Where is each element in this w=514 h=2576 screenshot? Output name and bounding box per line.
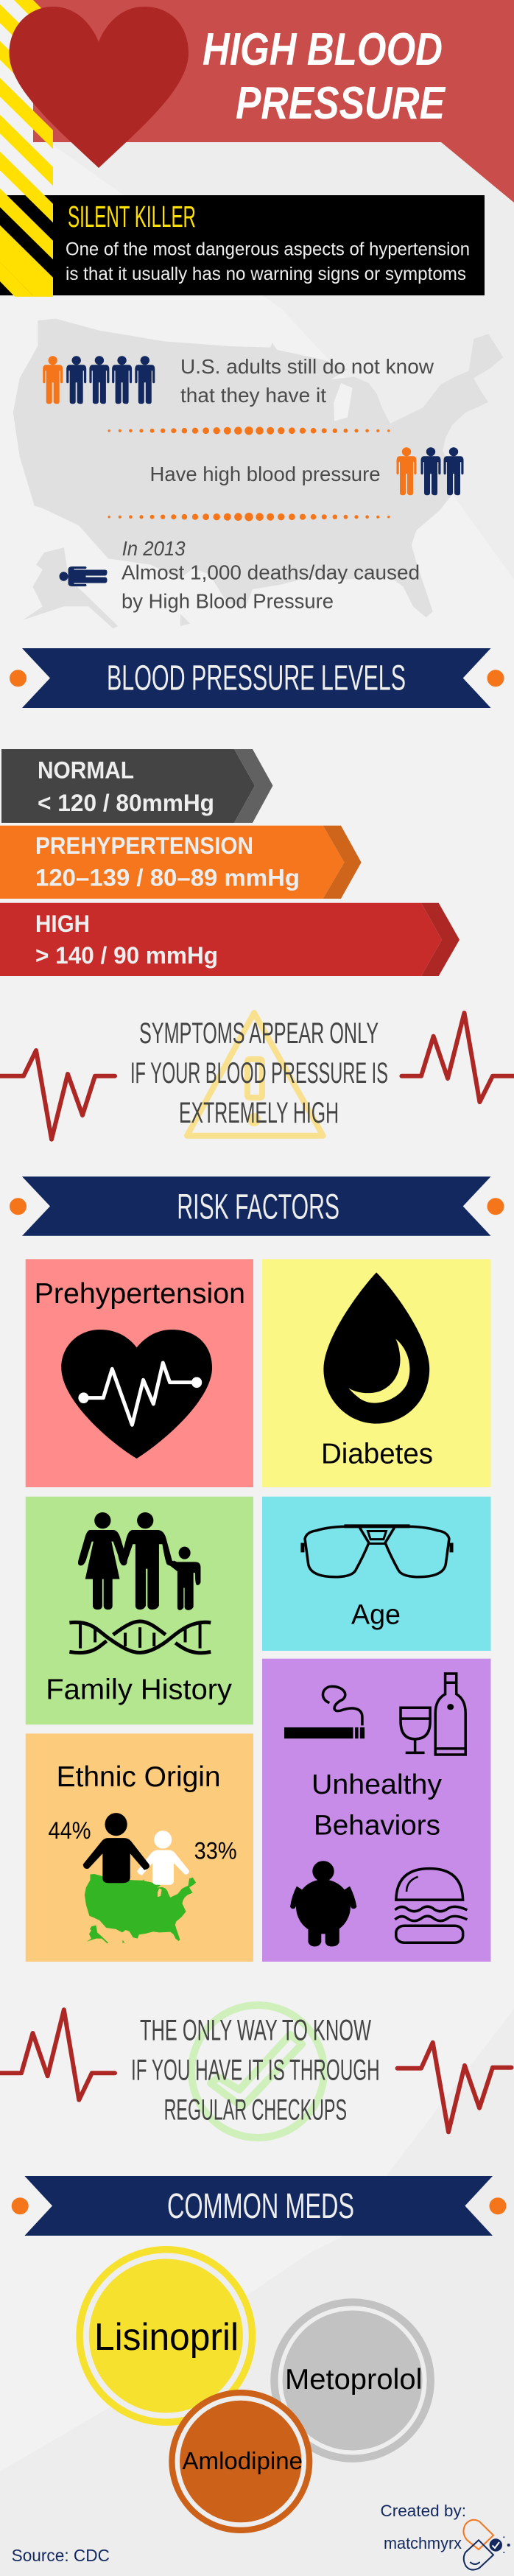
callout: checkups text: THE ONLY WAY TO KNOW	[140, 2014, 371, 2046]
hazard stripes with black panel	[0, 0, 485, 297]
heading: risk factors: RISK FACTORS	[177, 1187, 339, 1226]
text: silent killer description	[66, 239, 470, 284]
source note: Source: CDC	[12, 2546, 110, 2565]
icon: lying person	[59, 566, 108, 586]
level bar: normal	[1, 749, 272, 823]
icon: heart with pulse	[61, 1330, 212, 1459]
ECG line right, symptoms	[401, 1013, 514, 1102]
statistic: deaths per day	[59, 537, 420, 613]
circle: lisinopril	[76, 2246, 256, 2426]
label: diabetes: Diabetes	[321, 1439, 433, 1470]
icon: cigarette	[284, 1686, 365, 1738]
text: silent killer description: is that it usually has no warning signs or symptoms	[66, 264, 466, 284]
callout: checkups text: REGULAR CHECKUPS	[164, 2094, 347, 2126]
label: unhealthy behaviors: Behaviors	[314, 1810, 440, 1841]
icon: two figures	[83, 1813, 189, 1885]
credit: created by matchmyrx: matchmyrx	[384, 2534, 462, 2552]
circle: lisinopril: Lisinopril	[94, 2316, 239, 2359]
circle: metoprolol	[270, 2298, 434, 2463]
label: ethnic origin: Ethnic Origin	[57, 1761, 221, 1793]
icon: large red heart	[9, 7, 189, 168]
icon: five people	[43, 356, 155, 404]
level bar: high	[0, 903, 460, 976]
panel: ethnic origin	[26, 1733, 253, 1962]
credit: created by matchmyrx	[380, 2502, 510, 2570]
level bar: normal: < 120 / 80mmHg	[38, 790, 214, 816]
icon: green US map	[85, 1874, 196, 1943]
text: have high blood pressure: Have high blood pressure	[150, 463, 380, 485]
heading: risk factors	[10, 1176, 504, 1236]
header: red title banner	[33, 0, 514, 203]
label: prehypertension: Prehypertension	[35, 1278, 245, 1310]
level bar: prehypertension	[0, 826, 362, 899]
US map background	[13, 319, 503, 628]
text: adults unaware: U.S. adults still do not know	[180, 355, 434, 378]
level bar: prehypertension: PREHYPERTENSION	[35, 832, 253, 859]
icon: wine glass and bottle	[401, 1674, 465, 1755]
icon: check mark circle	[191, 2005, 324, 2138]
label: unhealthy behaviors	[311, 1769, 442, 1841]
icon: glasses	[303, 1526, 451, 1577]
text: deaths per day	[122, 537, 420, 613]
hazard stripes	[0, 0, 74, 297]
title	[203, 24, 446, 129]
dotted divider two	[108, 513, 390, 521]
panel: unhealthy behaviors	[262, 1659, 490, 1962]
text: adults unaware: that they have it	[180, 384, 326, 407]
level bar: normal: NORMAL	[38, 757, 134, 784]
silent killer text	[66, 200, 470, 284]
icon: matchmyrx logo	[463, 2520, 510, 2570]
callout: checkups text	[131, 2014, 380, 2126]
statistic: have high blood pressure	[150, 447, 464, 495]
label: age: Age	[351, 1599, 401, 1630]
panel: age	[262, 1497, 490, 1651]
ECG line left, checkups	[0, 2010, 115, 2100]
title: PRESSURE	[236, 78, 446, 129]
stat: 33 percent: 33%	[194, 1838, 237, 1864]
level bar: prehypertension: 120–139 / 80–89 mmHg	[35, 865, 300, 891]
circle: amlodipine: Amlodipine	[183, 2448, 303, 2475]
ECG line left, symptoms	[0, 1050, 115, 1140]
heading: silent killer: SILENT KILLER	[68, 200, 196, 234]
credit: created by matchmyrx: Created by:	[380, 2502, 466, 2520]
heading: blood pressure levels	[10, 648, 504, 708]
icon: warning triangle	[187, 1013, 323, 1136]
panel: diabetes	[262, 1259, 490, 1487]
label: unhealthy behaviors: Unhealthy	[311, 1769, 442, 1800]
panel: silent killer background	[0, 195, 485, 295]
heading: common meds: COMMON MEDS	[167, 2187, 354, 2226]
callout: symptoms text	[130, 1017, 388, 1129]
statistic: adults unaware	[43, 355, 434, 407]
circle: metoprolol: Metoprolol	[285, 2364, 423, 2396]
text: silent killer description: One of the most dangerous aspects of hypertension	[66, 239, 470, 260]
icon: three people	[396, 447, 464, 495]
callout: symptoms text: EXTREMELY HIGH	[179, 1097, 339, 1129]
text: deaths per day: by High Blood Pressure	[122, 590, 334, 613]
icon: DNA helix	[69, 1621, 211, 1653]
heading: common meds	[12, 2176, 506, 2236]
ECG line right, checkups	[398, 2043, 512, 2132]
title: HIGH BLOOD	[203, 24, 443, 75]
dotted divider one	[108, 427, 390, 435]
callout: symptoms text: SYMPTOMS APPEAR ONLY	[139, 1017, 379, 1050]
text: deaths per day: In 2013	[122, 537, 186, 560]
text: adults unaware	[180, 355, 434, 407]
panel: prehypertension	[26, 1259, 253, 1487]
icon: burger	[395, 1869, 467, 1942]
icon: blood drop with crescent	[323, 1272, 429, 1424]
panel: family history	[26, 1497, 253, 1724]
text: deaths per day: Almost 1,000 deaths/day caused	[122, 561, 420, 584]
level bar: high: HIGH	[35, 910, 90, 937]
level bar: high: > 140 / 90 mmHg	[35, 942, 218, 969]
label: family history: Family History	[46, 1674, 233, 1705]
icon: family	[78, 1512, 200, 1610]
circle: amlodipine	[169, 2390, 312, 2533]
icon: obese figure	[290, 1861, 356, 1946]
stat: 44 percent: 44%	[49, 1817, 91, 1844]
